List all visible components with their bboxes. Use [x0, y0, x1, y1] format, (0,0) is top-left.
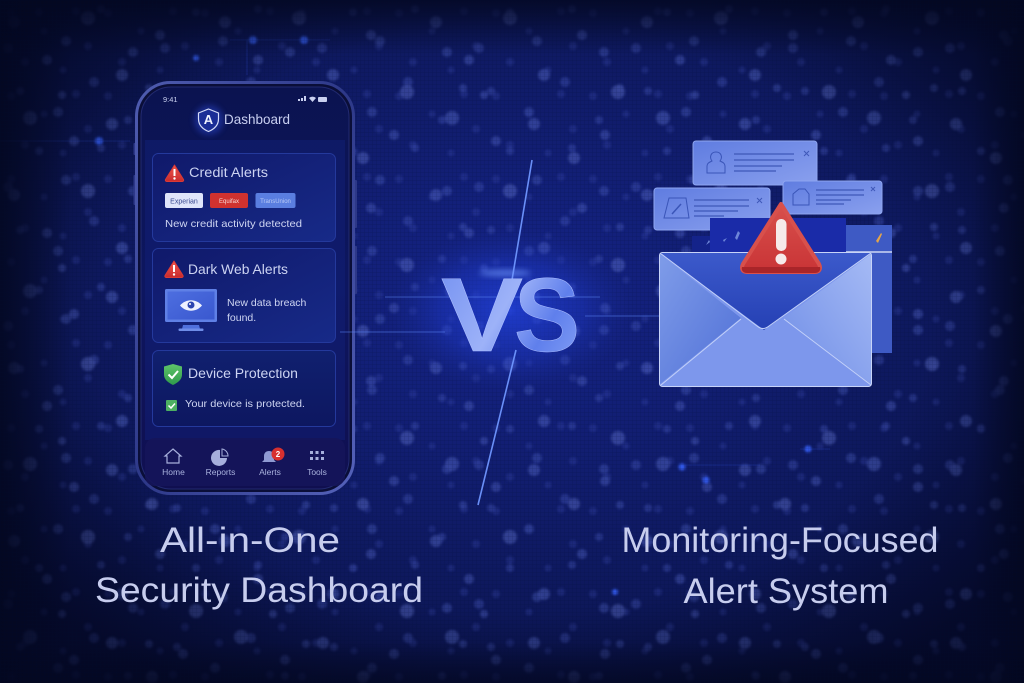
badge: Experian — [165, 193, 203, 208]
notification card: right — [783, 181, 882, 214]
nav: home: Home — [162, 467, 185, 477]
panel: device protection: Device Protection — [188, 366, 298, 381]
dashboard header: Dashboard — [224, 111, 290, 127]
nav: alerts with badge — [259, 448, 284, 477]
dark blue letter — [692, 218, 846, 256]
heading: monitoring-focused alert system: Monitoring-Focused — [622, 521, 938, 560]
panel: credit alerts — [152, 154, 336, 242]
heading: monitoring-focused alert system — [622, 521, 938, 611]
dashboard header — [194, 105, 290, 135]
icon: warning triangle — [165, 165, 184, 182]
panel: device protection — [152, 350, 336, 426]
bottom navigation — [162, 448, 327, 477]
VS emblem with light streaks: S — [514, 257, 580, 374]
envelope — [660, 252, 872, 386]
email alert illustration — [654, 141, 892, 386]
heading: all-in-one security dashboard: All-in-One — [160, 521, 340, 560]
heading: all-in-one security dashboard: Security Dashboard — [95, 571, 423, 610]
nav: reports: Reports — [206, 467, 235, 477]
icon: green checkbox — [166, 400, 177, 411]
heading: monitoring-focused alert system: Alert System — [684, 572, 888, 611]
nav: home — [162, 449, 185, 477]
dashboard header: A — [204, 112, 214, 127]
text: new data breach found: New data breach — [227, 297, 307, 309]
nav: alerts with badge: 2 — [276, 450, 281, 459]
notification card: left — [654, 188, 770, 230]
icon: monitor with eye — [165, 289, 217, 331]
nav: tools: Tools — [307, 467, 327, 477]
phone body and side buttons — [134, 82, 357, 494]
nav: tools — [307, 451, 327, 477]
panel: dark web alerts: Dark Web Alerts — [188, 262, 288, 277]
VS emblem with light streaks — [340, 160, 680, 505]
icon: warning triangle — [165, 261, 183, 278]
text: new data breach found: found. — [227, 312, 256, 324]
badge: Equifax — [210, 193, 248, 208]
nav: reports — [206, 449, 235, 477]
status bar — [163, 95, 327, 104]
panel: credit alerts: Credit Alerts — [189, 165, 268, 180]
phone mockup — [134, 82, 357, 494]
VS emblem with light streaks: V — [441, 257, 523, 374]
status bar: 9:41 — [163, 95, 178, 104]
badge: TransUnion: TransUnion — [260, 199, 291, 205]
icon: green shield check — [164, 364, 182, 385]
notification card: top — [693, 141, 817, 185]
badge: Experian: Experian — [170, 198, 198, 206]
panel: dark web alerts — [152, 248, 336, 342]
icon: large red warning triangle — [742, 204, 820, 273]
panel: device protection: Your device is protected. — [185, 398, 305, 410]
heading: all-in-one security dashboard — [95, 521, 423, 610]
back document — [846, 225, 892, 353]
badge: Equifax: Equifax — [219, 199, 239, 205]
panel: credit alerts: New credit activity detected — [165, 218, 302, 230]
badge: TransUnion — [256, 193, 296, 208]
nav: alerts with badge: Alerts — [259, 467, 281, 477]
